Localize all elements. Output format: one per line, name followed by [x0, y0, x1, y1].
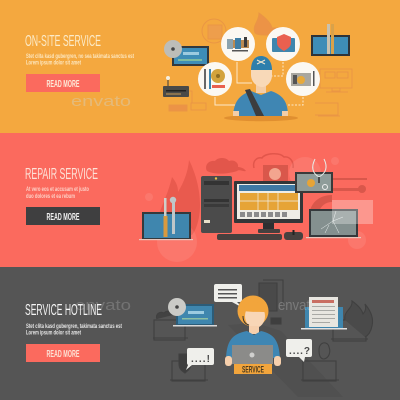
body text: repair service: At vero eos et accusam et justo [26, 187, 89, 193]
circle icon: parts [221, 27, 255, 61]
button: read more: READ MORE [46, 79, 80, 90]
icon: keyboard [217, 234, 282, 240]
heading: service hotline: SERVICE HOTLINE [25, 302, 102, 319]
circle icon: tools and disc [198, 62, 232, 96]
speech bubble: question: ....? [289, 346, 310, 357]
panel: service hotline [0, 267, 400, 400]
watermark: envato left: envato [75, 297, 131, 314]
translucent white card [332, 200, 373, 224]
body text: service hotline [26, 324, 122, 336]
panel: repair service [0, 133, 400, 267]
connector lines [215, 62, 303, 105]
icon: laptop with tools [139, 197, 193, 240]
operator figure [225, 296, 281, 374]
body text: on-site service: Lorem ipsum dolor sit amet [26, 60, 81, 66]
panel: on-site service [0, 0, 400, 133]
body text: service hotline: Stet clita kasd gubergren, takimata sanctus est [26, 324, 122, 330]
icon: pc tower [201, 176, 232, 233]
long shadow [228, 323, 343, 397]
body text: on-site service [26, 54, 134, 66]
speech bubble: exclamation [186, 348, 214, 370]
heading: repair service: REPAIR SERVICE [25, 166, 98, 183]
button: read more [26, 74, 100, 92]
background dark line icons [153, 280, 373, 381]
watermark: envato: envato [71, 93, 131, 110]
background flame and cloud icons [157, 154, 367, 235]
background line icons [169, 13, 352, 116]
icon: laptop with disc [168, 298, 217, 326]
technician figure [224, 56, 298, 121]
speech bubble: message lines [214, 284, 243, 308]
operator figure: SERVICE [242, 364, 264, 374]
icon: disc and laptop [164, 40, 209, 66]
body text: on-site service: Stet clita kasd gubergren, no sea takimata sanctus est [26, 54, 134, 60]
watermark: envato center: envat [278, 297, 311, 314]
button: read more [26, 207, 100, 225]
speech bubble: question [286, 339, 312, 362]
heading: on-site service: ON-SITE SERVICE [25, 33, 101, 50]
icon: router [163, 76, 189, 97]
circle icon: hardware board [286, 62, 320, 96]
icon: tablet with tools [311, 24, 350, 56]
decorative translucent circles [145, 157, 366, 262]
icon: mouse [284, 230, 303, 240]
body text: repair service [26, 187, 89, 200]
body text: service hotline: Lorem ipsum dolor sit amet [26, 330, 81, 336]
button: read more [26, 344, 100, 362]
button: read more: READ MORE [46, 212, 80, 223]
icon: tablet with stethoscope [295, 159, 333, 193]
circle icon: security shield [266, 27, 300, 61]
icon: laptop with document [301, 297, 347, 330]
speech bubble: exclamation: ....! [191, 354, 210, 365]
icon: broken laptop [306, 209, 361, 238]
body text: repair service: duo dolores et ea rebum [26, 194, 75, 200]
icon: desktop monitor [234, 181, 303, 233]
button: read more: READ MORE [46, 349, 80, 360]
